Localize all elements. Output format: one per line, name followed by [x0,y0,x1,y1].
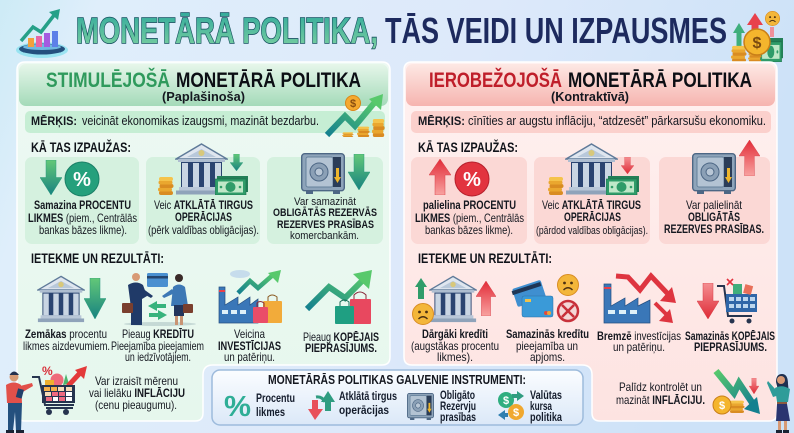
icon: shopping cart with rising prices: % [42,364,53,378]
card: raise reserve requirements: Var palielināt [686,198,743,212]
instrument: exchange rate policy: $ [513,407,519,419]
card: open market operations, selling: Veic ATKLĀTĀ TIRGUS [542,198,641,212]
result: stimulates investment [218,270,282,364]
card: raise interest rates: LIKMES (piem., Centrālās [415,211,524,225]
result: slows investment [597,276,681,354]
heading: impact and results: IETEKME UN REZULTĀTI: [418,250,552,266]
panel header: restrictive: MONETĀRĀ POLITIKA [568,69,752,92]
instrument: interest rates [224,391,295,423]
icon: down arrow and percent: % [73,169,91,191]
heading: how it shows: KĀ TAS IZPAUŽAS: [31,138,131,155]
instrument: open market operations: operācijas [339,403,389,417]
icon: safe and up arrow [693,140,760,194]
result: aggregate demand grows: Pieaug KOPĒJAIS [303,330,379,344]
instrument: reserve requirements: Obligāto [440,388,475,402]
heading: impact and results: IETEKME UN REZULTĀTI: [31,250,164,266]
result: more expensive credit: (augstākas procentu [411,339,499,353]
icon: safe and down arrow [302,154,370,194]
instrument: exchange rate policy: Valūtas [530,388,562,402]
card: lower interest rates [25,157,139,244]
result: credit grows: un iedzīvotājiem. [125,350,191,364]
icon: rising arrow with coins [327,94,385,137]
result: stimulates investment: un patēriņu. [224,350,275,364]
card: raise reserve requirements: REZERVES PRASĪBAS. [664,222,764,236]
result: aggregate demand decreases [685,279,775,354]
card: raise reserve requirements [659,140,770,244]
card: open market operations, buying: Veic ATKLĀTĀ TIRGUS [154,198,253,212]
result: credit grows: Pieaug KREDĪTU [122,327,194,341]
instrument: exchange rate policy: $ [503,395,509,407]
card: open market operations, selling [534,144,650,244]
goal bar: restrictive: MĒRĶIS: [418,114,465,128]
instrument: interest rates: likmes [256,405,285,419]
result: aggregate demand decreases: PIEPRASĪJUMS. [694,340,767,354]
card: open market operations, buying [146,144,260,244]
card: raise reserve requirements: OBLIGĀTĀS [688,210,740,224]
card: raise interest rates: bankas bāzes likme). [425,223,513,237]
result: credit decreases [506,274,589,364]
card: lower reserve requirements [267,154,383,244]
icon: money and rising prices [731,11,783,62]
goal bar: restrictive: cīnīties ar augstu inflāciju, “atdzesēt” pārkarsušu ekonomiku. [468,114,766,128]
card: open market operations, buying: OPERĀCIJAS [175,210,232,224]
card: lower reserve requirements: REZERVES PRASĪBAS [277,219,374,231]
instrument: interest rates: % [224,391,251,423]
card: open market operations, selling: (pārdod valdības obligācijas). [536,225,648,237]
instrument: exchange rate policy: kursa [530,399,552,413]
result: credit decreases: pieejamība un [516,339,578,353]
result: lower interest rates on loans: likmes aizdevumiem. [23,339,110,353]
goal bar: restrictive [411,111,771,133]
card: lower reserve requirements: OBLIGĀTĀS REZERVĀS [273,207,377,219]
heading: how it shows: KĀ TAS IZPAUŽAS: [418,138,518,155]
result: credit decreases: apjoms. [530,350,565,364]
title: MONETĀRĀ POLITIKA, [76,10,378,51]
callout: may cause inflation: (cenu pieaugumu). [95,398,177,412]
result: stimulates investment: INVESTĪCIJAS [218,339,281,353]
callout: may cause inflation [89,374,185,412]
heading: instruments: MONETĀRĀS POLITIKAS GALVENIE INSTRUMENTI: [268,372,526,387]
panel header: restrictive: IEROBEŽOJOŠĀ [429,68,562,92]
result: slows investment: Bremzē investīcijas [597,329,681,343]
result: stimulates investment: Veicina [234,327,265,341]
icon: shopping cart with rising prices [32,364,87,415]
card: raise interest rates: palielina PROCENTU [423,198,516,212]
instrument: exchange rate policy [498,388,562,424]
panel header: restrictive: (Kontraktīvā) [551,89,629,104]
instrument: open market operations: Atklātā tirgus [339,389,397,403]
callout: helps control inflation: Palīdz kontrolēt un [619,380,702,394]
card: raise interest rates [411,157,527,244]
result: more expensive credit: likmes). [437,350,473,364]
card: lower interest rates: bankas bāzes likme). [39,223,127,237]
panel header: stimulating: MONETĀRĀ POLITIKA [176,69,361,92]
panel: restrictive monetary policy [404,62,777,421]
result: more expensive credit: Dārgāki kredīti [422,327,488,341]
result: credit grows [111,273,204,364]
panel header: stimulating [19,64,388,106]
icon: up arrow and percent: % [463,169,481,191]
instrument: open market operations [308,389,397,420]
card: lower interest rates: Samazina PROCENTU [34,198,131,212]
card: lower reserve requirements: komercbankām. [290,230,359,242]
goal bar: stimulating: veicināt ekonomikas izaugsmi, mazināt bezdarbu. [82,114,319,128]
callout: helps control inflation: mazināt INFLĀCIJU. [616,393,705,407]
panel: stimulating monetary policy [17,62,390,421]
callout: helps control inflation [616,380,705,407]
card: lower interest rates: LIKMES (piem., Centrālās [28,211,137,225]
instrument: exchange rate policy: politika [530,410,562,424]
callout: may cause inflation: vai lielāku INFLĀCIJU [89,386,185,400]
goal bar: stimulating [25,111,385,133]
panel header: stimulating: STIMULĒJOŠĀ [46,68,170,92]
title [76,10,727,51]
icon: woman presenter [767,374,790,433]
result: lower interest rates on loans [23,276,110,353]
panel: main instruments [212,370,583,425]
result: credit grows: Pieejamība pieejamiem [111,339,204,353]
result: credit decreases: Samazinās kredītu [506,327,589,341]
result: aggregate demand grows [303,270,379,355]
instrument: reserve requirements: Rezervju [440,399,476,413]
callout: may cause inflation: Var izraisīt mērenu [95,374,178,388]
instrument: reserve requirements: prasības [440,410,476,424]
result: aggregate demand grows: PIEPRASĪJUMS. [305,341,377,355]
card: open market operations, buying: (pērk valdības obligācijas). [148,223,259,237]
instrument: reserve requirements [407,388,476,424]
goal bar: stimulating: MĒRĶIS: [31,114,77,128]
icon: person with tablet [6,372,33,433]
result: more expensive credit [411,276,499,364]
panel header: restrictive [406,64,775,106]
icon: falling prices with coins: $ [719,400,725,412]
instrument: interest rates: Procentu [256,391,295,405]
card: open market operations, selling: OPERĀCIJAS [564,210,621,224]
icon: money and rising prices: $ [753,35,762,52]
icon: bank with money [548,144,639,195]
icon: rising arrow with coins: $ [350,98,356,110]
icon: growth chart on podium [16,9,68,58]
icon: falling prices with coins [713,371,760,414]
card: lower reserve requirements: Var samazināt [294,196,356,208]
panel header: stimulating: (Paplašinoša) [162,89,245,104]
icon: bank with money [158,144,248,195]
result: slows investment: un patēriņu. [613,340,665,354]
result: lower interest rates on loans: Zemākas procentu [25,327,107,341]
